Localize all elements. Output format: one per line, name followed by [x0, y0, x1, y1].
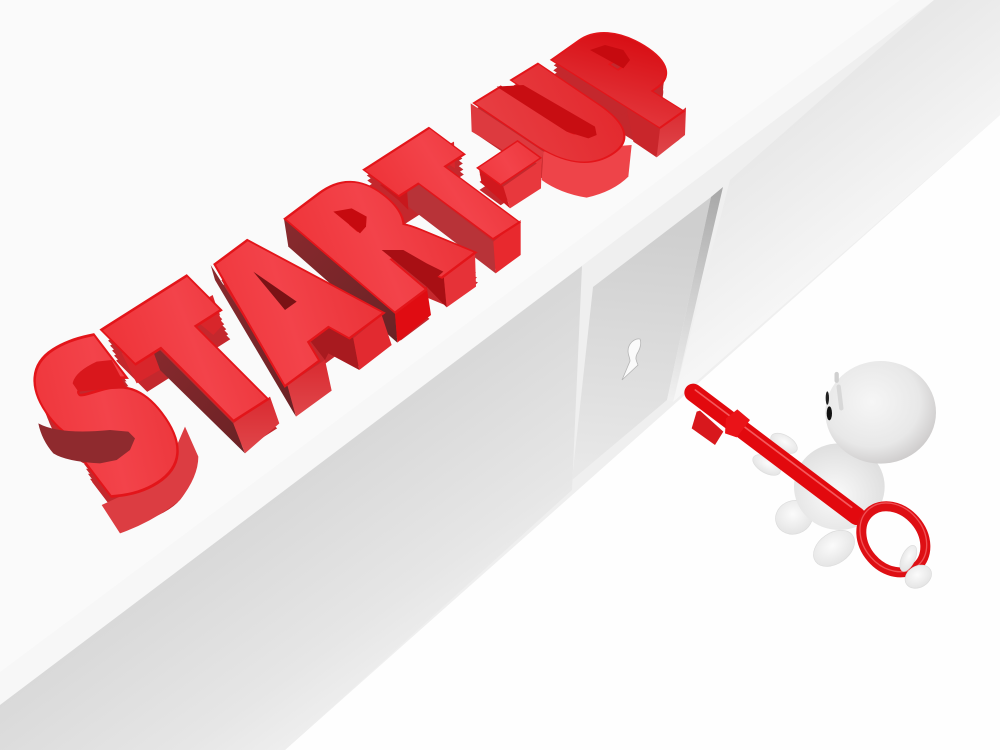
- letter R: R: [270, 167, 492, 348]
- wall: left front face: [0, 266, 582, 750]
- letter U: U: [457, 52, 665, 189]
- letter T (first): T: [101, 288, 318, 479]
- hyphen: -: [437, 112, 573, 208]
- letter S: S: [0, 302, 219, 536]
- hyphen: -: [437, 112, 573, 208]
- letter A: A: [180, 223, 399, 413]
- character: face: [826, 374, 841, 420]
- letter T (second): T: [353, 128, 557, 274]
- letter T (first): T: [99, 283, 316, 474]
- letter R: R: [269, 162, 491, 343]
- character: upper hand: [749, 429, 801, 480]
- letter T (first): T: [91, 263, 308, 454]
- icon: keyhole: [622, 339, 641, 380]
- letter S: S: [0, 302, 219, 536]
- letter S: S: [10, 330, 231, 564]
- letter T (first): T: [93, 268, 310, 459]
- letter T (second): T: [352, 118, 556, 264]
- door: [572, 187, 723, 480]
- letter P: P: [531, 42, 732, 171]
- letter P: P: [532, 33, 733, 162]
- letter U: U: [457, 67, 664, 204]
- letter U: U: [457, 57, 665, 194]
- key: [692, 390, 940, 585]
- character holding key: [692, 361, 940, 593]
- letter S: S: [8, 327, 229, 561]
- letter U: U: [456, 77, 664, 214]
- letter P: P: [533, 13, 734, 142]
- character: feet: [771, 495, 861, 574]
- letter U: U: [457, 72, 664, 209]
- character: body: [794, 443, 885, 530]
- letter R: R: [267, 152, 489, 333]
- letter T (second): T: [355, 150, 559, 296]
- letter T (second): T: [353, 134, 557, 280]
- floor: [285, 115, 1000, 750]
- letter T (second): T: [354, 145, 558, 291]
- letter A: A: [175, 208, 395, 398]
- character: lower hand: [896, 543, 936, 593]
- letter T (first): T: [97, 278, 314, 469]
- letter R: R: [271, 172, 493, 353]
- letter U: U: [457, 62, 665, 199]
- letter S: S: [6, 322, 227, 556]
- letter U: U: [457, 52, 665, 189]
- letter U: U: [456, 82, 664, 219]
- letter S: S: [4, 317, 225, 551]
- letter T (first): T: [103, 293, 320, 484]
- letter R: R: [272, 177, 494, 358]
- letter P: P: [533, 18, 734, 147]
- letter P: P: [532, 23, 733, 152]
- letter P: P: [532, 28, 733, 157]
- letter S: S: [0, 307, 221, 541]
- letter T (second): T: [352, 118, 556, 264]
- letter T (second): T: [354, 139, 558, 285]
- letter R: R: [273, 182, 495, 363]
- wall: right front face: [673, 0, 1000, 402]
- hyphen: -: [437, 126, 573, 222]
- letter A: A: [175, 208, 395, 398]
- letter P: P: [531, 38, 732, 167]
- character: head: [825, 361, 936, 464]
- letter R: R: [267, 152, 489, 333]
- letter P: P: [533, 13, 734, 142]
- letter T (first): T: [91, 263, 308, 454]
- hyphen: -: [437, 119, 573, 215]
- hyphen: -: [437, 134, 573, 230]
- letter A: A: [181, 228, 401, 418]
- letter R: R: [268, 157, 490, 338]
- letter S: S: [2, 312, 223, 546]
- letter A: A: [183, 233, 402, 423]
- letter A: A: [177, 213, 396, 403]
- letter T (first): T: [95, 273, 312, 464]
- letter A: A: [184, 238, 404, 428]
- letter A: A: [178, 218, 398, 408]
- letter T (second): T: [352, 123, 556, 269]
